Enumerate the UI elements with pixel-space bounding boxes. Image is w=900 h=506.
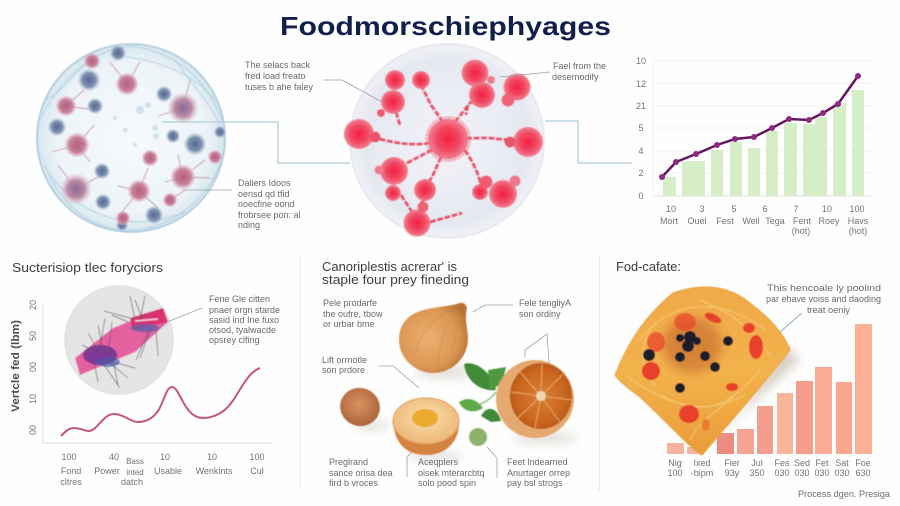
title: Foodmorschiephyages <box>280 11 611 41</box>
labels: foods panel: solo pood spin <box>418 478 476 488</box>
x axis labels: 5 <box>731 204 737 214</box>
y axis labels: 21 <box>636 101 646 111</box>
toast texture <box>625 300 770 440</box>
label: dish right note <box>552 61 606 82</box>
x axis labels: curve chart: 100 <box>249 452 265 462</box>
labels: foods panel: or urbar bme <box>323 319 375 329</box>
bar chart labels: Foe <box>855 458 871 468</box>
footer note: Process dgen. Presiga <box>798 489 890 499</box>
central debris <box>113 102 159 147</box>
label: lower sphere note: nding <box>238 220 260 230</box>
label: microbe note <box>209 294 280 345</box>
bar chart labels: 030 <box>774 468 790 478</box>
label: upper sphere note: fred load freato <box>245 71 306 81</box>
pink cells <box>56 53 222 225</box>
pink rod <box>75 308 168 375</box>
green bars <box>663 90 864 196</box>
bar chart: salmon bars <box>667 324 872 454</box>
y axis labels: 12 <box>636 79 646 89</box>
bar chart labels: -bipm <box>691 468 713 478</box>
leader: toast note <box>780 313 802 332</box>
x axis labels: 7 <box>793 204 799 214</box>
x axis labels: curve chart: Fond <box>61 466 81 476</box>
dark nucleus <box>83 345 117 365</box>
small egg <box>335 382 385 432</box>
label: upper sphere note: The selacs back <box>245 60 311 70</box>
x axis labels: curve chart: Usable <box>154 466 182 476</box>
label: toast note: par ehave voiss and daoding <box>766 294 881 304</box>
x axis labels: curve chart: 10 <box>207 452 217 462</box>
panel: blue cell sphere <box>37 44 226 232</box>
toast <box>615 287 790 455</box>
labels: foods panel: Fele tengliyA <box>519 298 571 308</box>
bar chart labels: Sat <box>835 458 849 468</box>
label: toast note: This hencoale ly poolind <box>767 283 881 293</box>
labels: foods panel: son ordiny <box>519 309 561 319</box>
x axis labels: Tega <box>765 216 785 226</box>
divider left <box>300 255 302 490</box>
connector: sphere to dish <box>162 122 350 163</box>
leader: microbe note <box>167 308 202 322</box>
orange half <box>496 360 574 438</box>
label: lower sphere note: Daliers Idoos <box>238 178 291 188</box>
bar chart labels: Fes <box>774 458 790 468</box>
grid <box>653 61 872 196</box>
toast shadow <box>705 345 800 450</box>
x axis labels: curve chart: datch <box>121 477 143 487</box>
leader: lower sphere note <box>183 189 232 191</box>
label: upper sphere note <box>245 60 314 92</box>
y tick labels: 50 <box>28 331 38 341</box>
label: lower sphere note <box>238 178 301 230</box>
flagella <box>82 296 158 388</box>
soft shadows <box>354 365 577 461</box>
y tick labels <box>28 300 38 435</box>
purple trend line <box>662 76 858 177</box>
label: lower sphere note: frobrsee pon: al <box>238 210 301 220</box>
x axis labels: curve chart: Cul <box>250 466 264 476</box>
heading: food panel: Canoriplestis acrerar' is <box>322 259 457 274</box>
panel: foods illustration <box>335 303 577 461</box>
y axis labels: 5 <box>638 123 644 133</box>
x axis labels: (hot) <box>849 226 867 236</box>
label: microbe note: otsod, tyalwacde <box>209 325 276 335</box>
x axis labels: curve chart: Power <box>94 466 120 476</box>
labels: foods panel: sance orisa dea <box>329 468 393 478</box>
x axis labels: curve chart: Wenkints <box>196 466 233 476</box>
green sprout <box>469 428 487 446</box>
y tick labels: 00 <box>28 362 38 372</box>
label: dish right note: desernodify <box>552 72 599 82</box>
onion <box>399 303 468 373</box>
x axis labels: 100 <box>849 204 865 214</box>
bar chart labels: 100 <box>667 468 683 478</box>
y axis labels: 10 <box>636 56 646 66</box>
leader: upper dish right note <box>500 72 550 77</box>
label: toast note: treat oeniy <box>807 305 851 315</box>
labels: foods panel: Preglrand <box>329 457 368 467</box>
labels: foods panel: the oufre, tbow <box>323 309 383 319</box>
membrane fibres <box>40 46 225 230</box>
panel: line and bar chart <box>636 56 872 236</box>
labels: foods panel: Anurtager orrep <box>507 468 570 478</box>
labels: foods panel: Lift orrnotle <box>322 355 367 365</box>
x axis labels: Fest <box>716 216 734 226</box>
connector: dish to line chart <box>545 121 632 163</box>
blue cells <box>48 45 226 231</box>
labels: foods panel: pay bsl strogs <box>507 478 563 488</box>
bar chart labels: Sed <box>794 458 810 468</box>
divider right <box>598 255 600 490</box>
label: upper sphere note: tuses b ahe faley <box>245 82 314 92</box>
red curve <box>61 368 260 436</box>
bar chart labels: 350 <box>749 468 765 478</box>
bar chart labels: 030 <box>814 468 830 478</box>
x axis labels: curve chart: cltres <box>60 477 82 487</box>
bar chart labels: 030 <box>794 468 810 478</box>
heading: food panel <box>322 259 469 287</box>
label: toast note <box>766 283 881 315</box>
jam patches <box>642 311 763 431</box>
x axis labels: curve chart <box>60 452 265 487</box>
x axis labels: Fent <box>793 216 812 226</box>
bar chart labels: Fet <box>815 458 829 468</box>
x axis labels: Ouel <box>687 216 707 226</box>
axes <box>43 303 273 443</box>
red filaments <box>372 85 520 222</box>
herb leaves <box>459 363 506 422</box>
labels: foods panel: fird b vroces <box>329 478 379 488</box>
bar chart labels: 630 <box>855 468 871 478</box>
dark berries <box>643 331 733 393</box>
bar chart labels: Nig <box>668 458 682 468</box>
x axis labels: 3 <box>699 204 705 214</box>
red cells <box>344 60 543 236</box>
labels: foods panel: oisek mterarcbtq <box>418 468 485 478</box>
label: microbe note: opsrey clfing <box>209 335 260 345</box>
y tick labels: 00 <box>28 425 38 435</box>
label: lower sphere note: oensd qd tfid <box>238 189 290 199</box>
x axis labels: curve chart: 40 <box>109 452 119 462</box>
labels: foods panel <box>322 298 571 488</box>
cut half fruit <box>393 398 459 455</box>
y axis title: Vertcle fed (lbm) <box>10 320 22 412</box>
labels: foods panel: Pele prodarfe <box>323 298 377 308</box>
panel: curve chart <box>10 286 273 443</box>
heading: bottom left: Sucterisiop tlec foryciors <box>12 260 164 275</box>
labels: foods panel: Feet lndearned <box>507 457 568 467</box>
icon: toast with berries <box>615 287 800 455</box>
dish <box>350 44 544 238</box>
x axis labels: (hot) <box>792 226 810 236</box>
heading: food panel: staple four prey fineding <box>322 272 469 287</box>
bar chart labels: 030 <box>834 468 850 478</box>
pink cell tendrils <box>52 62 210 212</box>
x axis labels: curve chart: Bass <box>126 457 144 466</box>
x axis labels: 10 <box>666 204 676 214</box>
heading: food-calorie panel: Fod-cafate: <box>616 259 681 274</box>
x axis labels <box>660 204 869 236</box>
microbe circle <box>65 286 173 394</box>
bar chart labels: Fier <box>724 458 740 468</box>
x axis labels: Roey <box>818 216 840 226</box>
x axis labels: Weil <box>742 216 760 226</box>
label: microbe note: sasid ind Ine fuxo <box>209 315 279 325</box>
label: lower sphere note: noecfine oond <box>238 199 295 209</box>
bar chart labels: Jul <box>751 458 763 468</box>
panel: red cell dish <box>344 44 544 238</box>
y tick labels: 10 <box>28 394 38 404</box>
y axis labels: 4 <box>638 146 644 156</box>
y axis labels: 0 <box>638 191 644 201</box>
bar chart labels: Ixed <box>693 458 711 468</box>
bar chart labels: 93y <box>725 468 740 478</box>
x axis labels: Havs <box>848 216 869 226</box>
label: dish right note: Fael from the <box>553 61 606 71</box>
x axis labels: curve chart: inted <box>126 468 144 477</box>
label: microbe note: Fene Gle citten <box>209 294 270 304</box>
x axis labels: 6 <box>762 204 768 214</box>
label: microbe note: pnaer orgn starde <box>209 305 280 315</box>
browned centre <box>662 317 722 373</box>
labels: foods panel: Aceqplers <box>418 457 459 467</box>
y tick labels: 20 <box>28 300 38 310</box>
leaders: foods panel <box>378 305 549 478</box>
y axis labels: 2 <box>638 168 644 178</box>
bar chart labels <box>667 458 871 478</box>
leader: upper dish left note <box>323 80 382 102</box>
y axis labels <box>636 56 646 201</box>
x axis labels: 10 <box>822 204 832 214</box>
x axis labels: curve chart: 10 <box>160 452 170 462</box>
line markers <box>659 73 861 180</box>
sphere body <box>37 44 225 232</box>
labels: foods panel: son prdore <box>322 365 365 375</box>
x axis labels: curve chart: 100 <box>61 452 77 462</box>
x axis labels: Mort <box>660 216 678 226</box>
